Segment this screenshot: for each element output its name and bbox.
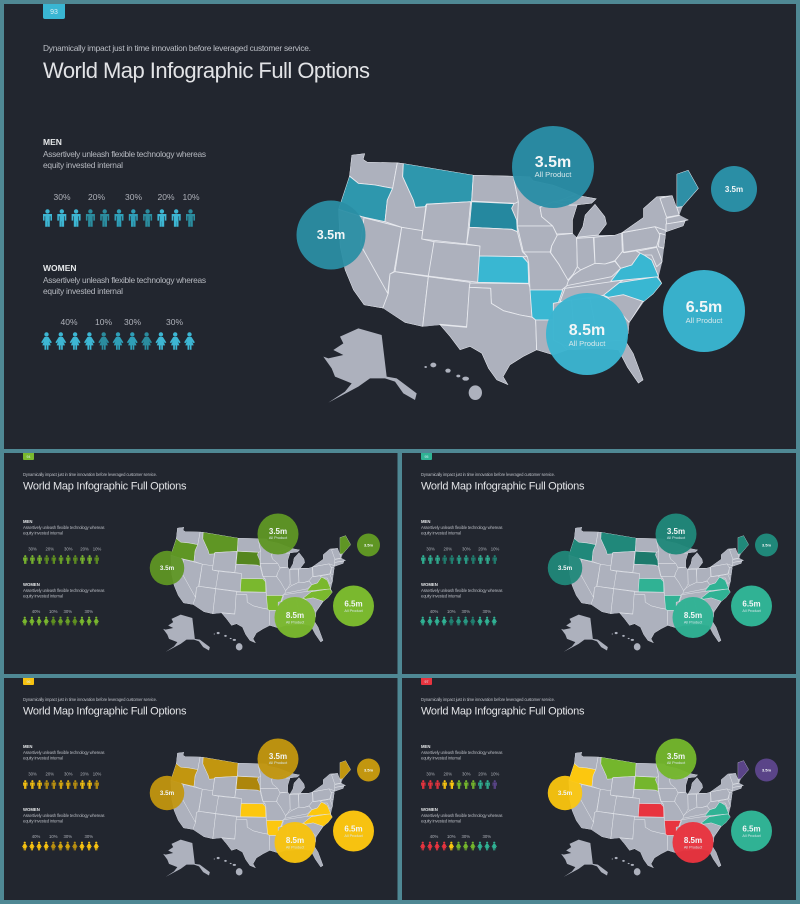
bubble: east 6.5m: 6.5m — [742, 824, 761, 834]
bubble: north-east 3.5m: 3.5m — [364, 768, 373, 772]
men pictogram row — [23, 555, 99, 564]
slide content — [22, 453, 380, 652]
men percentage labels: 20% — [88, 192, 105, 202]
slide content — [420, 678, 778, 877]
women percentage labels: 30% — [461, 834, 470, 839]
men percentage labels: 20% — [443, 546, 452, 552]
bubble: south 8.5m — [274, 597, 316, 638]
map of the United States — [561, 752, 749, 877]
men text block: MEN — [43, 137, 62, 147]
women percentage labels — [60, 317, 183, 327]
women pictogram row — [22, 617, 99, 625]
title: World Map Infographic Full Options — [421, 480, 585, 492]
bubble: west 3.5m: 3.5m — [317, 228, 345, 242]
map of the United States — [323, 153, 699, 403]
women percentage labels: 30% — [482, 609, 491, 614]
bubble: east 6.5m — [731, 586, 772, 626]
men percentage labels: 10% — [93, 772, 101, 776]
bubble: north 3.5m: 3.5m — [269, 752, 287, 761]
bubble: east 6.5m: All Product — [742, 834, 762, 838]
men text block: MEN — [23, 744, 32, 749]
women percentage labels: 30% — [84, 609, 93, 614]
bubble: north-east 3.5m: 3.5m — [762, 768, 771, 772]
men text block: Assertively unleash flexible technology whereas — [23, 525, 104, 530]
bubble: south 8.5m — [672, 822, 714, 863]
men percentage labels: 30% — [28, 546, 37, 552]
bubble: west 3.5m: 3.5m — [160, 790, 175, 797]
bubble: south 8.5m: 8.5m — [684, 836, 702, 845]
men text block: Assertively unleash flexible technology whereas — [23, 750, 104, 755]
women text block — [43, 263, 206, 296]
men percentage labels: 30% — [28, 772, 37, 776]
men percentage labels: 30% — [462, 772, 471, 776]
bubble: east 6.5m — [333, 810, 374, 852]
men text block — [23, 519, 104, 536]
bubble: west 3.5m — [548, 776, 582, 810]
bubble: west 3.5m: 3.5m — [558, 565, 573, 572]
bubble: north 3.5m: 3.5m — [535, 154, 571, 171]
women pictogram row — [22, 842, 99, 850]
men text block: equity invested internal — [421, 530, 461, 536]
slide content — [22, 678, 380, 877]
men text block — [421, 744, 502, 760]
men percentage labels: 20% — [443, 772, 452, 776]
subtitle: Dynamically impact just in time innovation before leveraged customer service. — [23, 697, 157, 702]
men text block: MEN — [421, 744, 430, 749]
men percentage labels: 10% — [491, 546, 499, 552]
men percentage labels: 30% — [462, 546, 471, 552]
panel: multicolour slide — [402, 678, 796, 900]
men text block: equity invested internal — [23, 530, 63, 536]
bubble: north 3.5m — [512, 126, 594, 208]
bubble: south 8.5m — [672, 597, 714, 638]
men percentage labels — [53, 192, 200, 202]
men percentage labels: 20% — [80, 546, 89, 552]
men percentage labels: 20% — [157, 192, 175, 202]
men text block — [43, 137, 206, 170]
women pictogram row — [420, 617, 497, 625]
title: World Map Infographic Full Options — [43, 58, 370, 83]
women text block: WOMEN — [421, 807, 438, 812]
men text block: equity invested internal — [23, 756, 63, 760]
men percentage labels: 20% — [45, 772, 54, 776]
bubble: south 8.5m: 8.5m — [286, 836, 304, 845]
men percentage labels: 30% — [64, 546, 73, 552]
page number badge — [421, 453, 432, 460]
women percentage labels: 40% — [60, 317, 78, 327]
bubble: west 3.5m — [150, 776, 184, 810]
bubble: north-east 3.5m — [357, 758, 380, 782]
panel: yellow slide — [4, 678, 398, 900]
women percentage labels: 30% — [63, 609, 72, 614]
women text block — [23, 582, 104, 598]
women text block: WOMEN — [421, 582, 438, 587]
women percentage labels: 10% — [447, 609, 456, 614]
men text block: MEN — [23, 519, 32, 524]
bubble: east 6.5m: 6.5m — [344, 824, 363, 834]
bubble: south 8.5m: All Product — [286, 620, 305, 624]
women percentage labels: 10% — [447, 834, 456, 839]
women text block: Assertively unleash flexible technology whereas — [23, 588, 104, 593]
men pictogram row — [43, 209, 195, 227]
women percentage labels: 10% — [49, 834, 58, 839]
women text block: equity invested internal — [23, 818, 63, 824]
bubble: west 3.5m: 3.5m — [558, 790, 573, 797]
title: World Map Infographic Full Options — [421, 706, 585, 718]
men percentage labels: 20% — [478, 546, 487, 552]
women percentage labels: 40% — [32, 834, 40, 839]
bubble: west 3.5m — [548, 551, 582, 585]
women text block: equity invested internal — [43, 286, 123, 296]
title: World Map Infographic Full Options — [23, 480, 187, 492]
women text block: WOMEN — [23, 582, 40, 587]
men percentage labels: 10% — [491, 772, 499, 776]
women percentage labels: 30% — [461, 609, 470, 614]
page number badge — [23, 453, 34, 460]
men percentage labels: 30% — [53, 192, 71, 202]
women text block: Assertively unleash flexible technology whereas — [421, 813, 502, 818]
bubble: south 8.5m: 8.5m — [569, 322, 605, 339]
women text block: Assertively unleash flexible technology whereas — [43, 275, 206, 285]
men percentage labels: 30% — [125, 192, 142, 202]
bubble: north 3.5m: All Product — [269, 761, 288, 765]
women text block — [421, 807, 502, 824]
page number badge: 95 — [425, 455, 428, 459]
panel: main blue slide — [4, 4, 796, 449]
page number badge — [421, 678, 432, 685]
bubble: east 6.5m: All Product — [344, 609, 364, 613]
bubble: south 8.5m: All Product — [569, 339, 606, 348]
page number badge: 97 — [425, 680, 428, 684]
men text block: Assertively unleash flexible technology whereas — [43, 149, 206, 159]
men percentage labels: 30% — [426, 772, 435, 776]
men percentage labels: 20% — [45, 546, 54, 552]
men percentage labels — [426, 772, 499, 776]
women percentage labels: 30% — [124, 317, 141, 327]
bubble: north 3.5m: All Product — [535, 170, 572, 179]
women text block: equity invested internal — [421, 818, 461, 824]
panel: teal slide — [402, 453, 796, 674]
bubble: north 3.5m: 3.5m — [667, 752, 685, 761]
women text block: WOMEN — [23, 807, 40, 812]
bubble: north-east 3.5m: 3.5m — [762, 542, 771, 548]
men pictogram row — [421, 555, 497, 564]
page number badge: 93 — [50, 9, 58, 16]
women percentage labels — [430, 609, 491, 614]
men percentage labels: 30% — [64, 772, 73, 776]
title: World Map Infographic Full Options — [23, 706, 187, 718]
men pictogram row — [421, 780, 497, 789]
women percentage labels: 30% — [84, 834, 93, 839]
bubble: east 6.5m: 6.5m — [742, 600, 761, 608]
bubble: south 8.5m — [274, 822, 316, 863]
women text block: Assertively unleash flexible technology whereas — [421, 588, 502, 593]
bubble: north 3.5m — [656, 514, 696, 554]
bubble: west 3.5m: 3.5m — [160, 565, 175, 572]
bubble: north-east 3.5m: 3.5m — [725, 185, 743, 194]
bubble: south 8.5m — [546, 293, 628, 375]
men percentage labels: 20% — [478, 772, 487, 776]
men percentage labels — [426, 546, 499, 552]
bubble: north-east 3.5m — [357, 534, 380, 556]
men percentage labels — [28, 546, 101, 552]
bubble: east 6.5m: All Product — [344, 834, 364, 838]
women percentage labels — [32, 609, 93, 614]
bubble: north 3.5m — [656, 738, 696, 780]
bubble: west 3.5m — [296, 200, 366, 270]
map of the United States — [163, 527, 351, 652]
bubble: north 3.5m — [258, 738, 298, 780]
bubble: north-east 3.5m — [755, 534, 778, 556]
men text block: equity invested internal — [43, 160, 123, 170]
men percentage labels: 20% — [80, 772, 89, 776]
page number badge: 96 — [27, 680, 30, 684]
panel: green slide — [4, 453, 398, 674]
men text block: equity invested internal — [421, 756, 461, 760]
men percentage labels: 10% — [182, 192, 200, 202]
women text block: equity invested internal — [421, 594, 461, 598]
women text block — [421, 582, 502, 598]
men pictogram row — [23, 780, 99, 789]
men percentage labels: 10% — [93, 546, 101, 552]
bubble: north-east 3.5m — [711, 166, 757, 212]
map of the United States — [163, 752, 351, 877]
women text block: WOMEN — [43, 263, 77, 273]
bubble: east 6.5m — [333, 586, 374, 626]
men text block: MEN — [421, 519, 430, 524]
women text block: Assertively unleash flexible technology whereas — [23, 813, 104, 818]
bubble: east 6.5m: All Product — [686, 316, 723, 325]
bubble: north 3.5m: 3.5m — [667, 527, 685, 536]
bubble: east 6.5m — [731, 810, 772, 852]
bubble: north 3.5m: All Product — [667, 761, 686, 765]
bubble: north-east 3.5m — [755, 758, 778, 782]
women percentage labels — [430, 834, 491, 839]
men text block: Assertively unleash flexible technology whereas — [421, 750, 502, 755]
bubble: south 8.5m: All Product — [684, 846, 703, 850]
men text block — [23, 744, 104, 760]
bubble: south 8.5m: 8.5m — [286, 611, 304, 620]
men percentage labels: 30% — [426, 546, 435, 552]
bubble: south 8.5m: 8.5m — [684, 611, 702, 620]
bubble: west 3.5m — [150, 551, 184, 585]
men percentage labels — [28, 772, 101, 776]
slide content — [420, 453, 778, 652]
page number badge — [43, 4, 65, 19]
bubble: north 3.5m: All Product — [269, 536, 288, 540]
women text block: equity invested internal — [23, 594, 63, 598]
bubble: north 3.5m: All Product — [667, 536, 686, 540]
subtitle: Dynamically impact just in time innovation before leveraged customer service. — [23, 472, 157, 477]
women percentage labels: 40% — [430, 834, 438, 839]
bubble: east 6.5m: 6.5m — [686, 299, 722, 316]
women percentage labels: 30% — [63, 834, 72, 839]
page number badge — [23, 678, 34, 685]
women percentage labels: 40% — [32, 609, 40, 614]
map of the United States — [561, 527, 749, 652]
women pictogram row — [41, 332, 195, 350]
subtitle: Dynamically impact just in time innovation before leveraged customer service. — [43, 43, 311, 53]
women percentage labels: 10% — [95, 317, 112, 327]
women percentage labels: 10% — [49, 609, 58, 614]
bubble: north 3.5m — [258, 514, 298, 554]
bubble: east 6.5m: 6.5m — [344, 600, 363, 608]
men text block — [421, 519, 502, 536]
subtitle: Dynamically impact just in time innovation before leveraged customer service. — [421, 472, 555, 477]
subtitle: Dynamically impact just in time innovation before leveraged customer service. — [421, 697, 555, 702]
women percentage labels: 30% — [166, 317, 183, 327]
bubble: south 8.5m: All Product — [684, 620, 703, 624]
bubble: north-east 3.5m: 3.5m — [364, 542, 373, 548]
bubble: north 3.5m: 3.5m — [269, 527, 287, 536]
bubble: east 6.5m: All Product — [742, 609, 762, 613]
bubble: east 6.5m — [663, 270, 745, 352]
bubble: south 8.5m: All Product — [286, 846, 305, 850]
women percentage labels: 30% — [482, 834, 491, 839]
women text block — [23, 807, 104, 824]
women pictogram row — [420, 842, 497, 850]
women percentage labels: 40% — [430, 609, 438, 614]
men text block: Assertively unleash flexible technology whereas — [421, 525, 502, 530]
women percentage labels — [32, 834, 93, 839]
page number badge: 94 — [27, 455, 30, 459]
